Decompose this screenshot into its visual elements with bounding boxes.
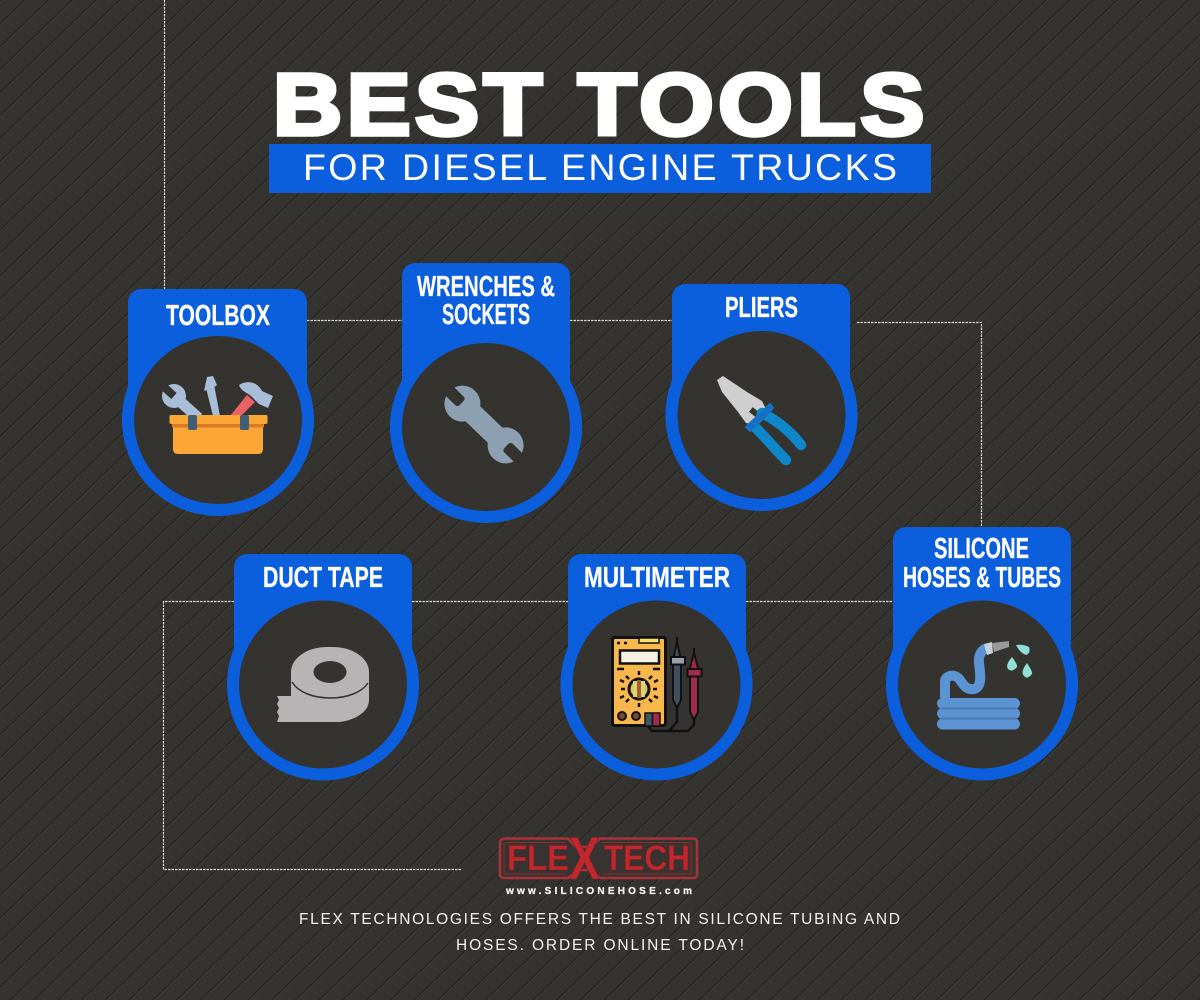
panel: wrenches and sockets [390, 263, 582, 523]
panel: toolbox [122, 289, 314, 516]
heading: silicone hoses and tubes [903, 533, 1061, 594]
heading: silicone hoses and tubes: HOSES & TUBES [903, 562, 1061, 594]
icon: garden hose [937, 641, 1032, 730]
icon: duct tape [277, 647, 369, 722]
panel: pliers [666, 284, 858, 511]
subtitle banner: FOR DIESEL ENGINE TRUCKS [303, 146, 897, 188]
logo: FlexTech: FLE [507, 839, 569, 878]
connector: dashed line route [164, 0, 982, 870]
footer text: HOSES. ORDER ONLINE TODAY! [456, 937, 744, 954]
heading: multimeter: MULTIMETER [584, 562, 730, 594]
title: BEST TOOLS [273, 56, 924, 154]
logo: FlexTech: TECH [604, 839, 690, 878]
panel: duct tape [227, 554, 419, 780]
heading: wrenches and sockets: WRENCHES & [417, 271, 555, 303]
heading: toolbox: TOOLBOX [166, 300, 270, 332]
heading: silicone hoses and tubes: SILICONE [934, 533, 1029, 565]
footer text: FLEX TECHNOLOGIES OFFERS THE BEST IN SILICONE TUBING AND [299, 911, 900, 928]
panel: multimeter [560, 554, 752, 780]
heading: duct tape: DUCT TAPE [263, 562, 383, 594]
logo: FlexTech: X [569, 825, 600, 892]
heading: pliers: PLIERS [725, 292, 798, 324]
panel: silicone hoses and tubes [886, 527, 1078, 780]
logo: FlexTech: www.SILICONEHOSE.com [505, 886, 692, 897]
footer text [299, 911, 900, 954]
icon: toolbox [156, 376, 273, 454]
icon: wrench [434, 375, 534, 474]
icon: multimeter [612, 637, 702, 731]
icon: pliers [717, 376, 801, 460]
heading: wrenches and sockets: SOCKETS [442, 299, 530, 331]
logo: FlexTech [500, 825, 697, 897]
heading: wrenches and sockets [417, 271, 555, 331]
